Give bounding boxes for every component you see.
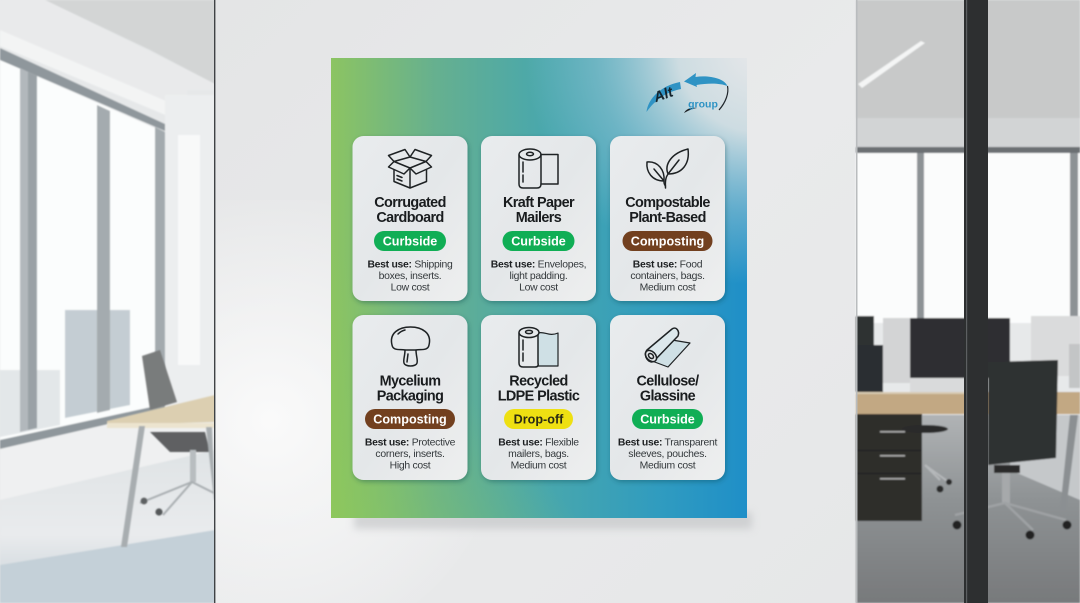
icon: mushroom bbox=[391, 327, 430, 366]
glass door frame bbox=[856, 0, 988, 603]
badge: composting bbox=[365, 409, 455, 429]
card: corrugated cardboard bbox=[352, 136, 468, 301]
description: Best use: Transparent bbox=[618, 438, 717, 448]
wall panel bbox=[214, 0, 856, 603]
badge: composting: Composting bbox=[373, 412, 447, 426]
description: High cost bbox=[390, 460, 431, 472]
description: corners, inserts. bbox=[375, 449, 445, 460]
badge: curbside: Curbside bbox=[383, 234, 437, 248]
description: Best use: Envelopes, bbox=[491, 260, 586, 270]
badge: curbside bbox=[374, 231, 446, 251]
icon: leaves bbox=[647, 149, 688, 188]
title: Recycled bbox=[509, 374, 568, 390]
badge: curbside bbox=[502, 231, 574, 251]
title: Glassine bbox=[640, 388, 696, 404]
icon: plastic film roll bbox=[519, 328, 558, 367]
card: recycled LDPE plastic bbox=[481, 315, 596, 480]
description: boxes, inserts. bbox=[379, 271, 441, 282]
description: containers, bags. bbox=[630, 271, 705, 282]
badge: curbside bbox=[632, 409, 703, 429]
description: Best use: Protective bbox=[365, 438, 455, 448]
description: Best use: Food bbox=[633, 260, 702, 270]
description: mailers, bags. bbox=[508, 449, 569, 460]
description: Medium cost bbox=[640, 282, 696, 294]
badge: curbside: Curbside bbox=[640, 412, 695, 426]
card: cellulose glassine bbox=[610, 315, 725, 480]
badge: composting: Composting bbox=[631, 234, 704, 248]
title: Kraft Paper bbox=[503, 195, 575, 211]
poster bbox=[331, 58, 747, 518]
card: compostable plant-based bbox=[610, 136, 725, 301]
badge: drop-off bbox=[504, 409, 573, 429]
description: Medium cost bbox=[511, 460, 567, 472]
title: LDPE Plastic bbox=[498, 388, 580, 404]
title: Mailers bbox=[516, 210, 562, 226]
description: light padding. bbox=[510, 271, 567, 282]
description: Best use: Shipping bbox=[367, 260, 453, 270]
title: Plant-Based bbox=[629, 210, 706, 226]
badge: curbside: Curbside bbox=[511, 234, 566, 248]
description: Low cost bbox=[391, 282, 430, 294]
icon: cardboard box bbox=[388, 150, 432, 188]
poster shadow bbox=[354, 512, 752, 529]
left office scene bbox=[0, 0, 215, 603]
logo wordmark: group: group bbox=[688, 98, 718, 110]
title: Mycelium bbox=[380, 374, 440, 390]
logo wordmark: Alt: Alt bbox=[651, 84, 677, 106]
title: Corrugated bbox=[374, 195, 446, 211]
title: Compostable bbox=[625, 195, 710, 211]
title: Packaging bbox=[377, 388, 443, 404]
card: kraft paper mailers bbox=[481, 136, 596, 301]
description: Medium cost bbox=[640, 460, 696, 472]
badge: drop-off: Drop-off bbox=[514, 412, 564, 426]
icon: film sheet roll bbox=[643, 328, 690, 367]
title: Cellulose/ bbox=[637, 374, 699, 390]
card: mycelium packaging bbox=[352, 315, 468, 480]
badge: composting bbox=[622, 231, 712, 251]
description: Best use: Flexible bbox=[498, 438, 579, 448]
icon: paper roll bbox=[519, 149, 558, 188]
right office scene bbox=[856, 0, 1080, 603]
title: Cardboard bbox=[376, 210, 444, 226]
description: sleeves, pouches. bbox=[628, 449, 707, 460]
description: Low cost bbox=[519, 282, 558, 294]
logo bbox=[646, 73, 728, 113]
left desk and chair bbox=[107, 350, 215, 547]
